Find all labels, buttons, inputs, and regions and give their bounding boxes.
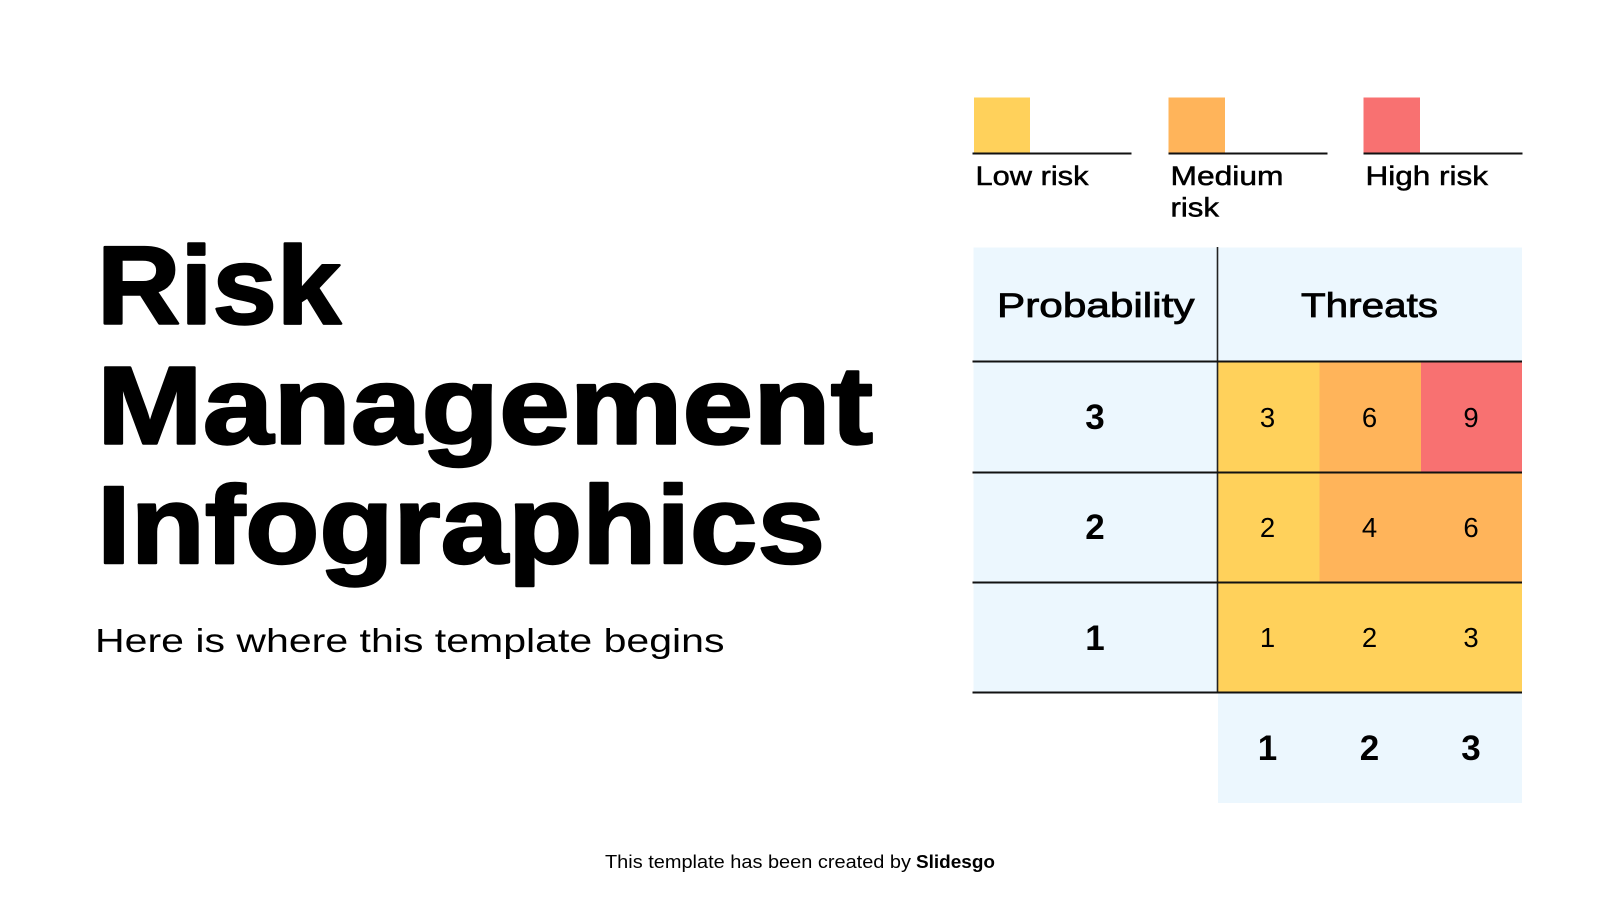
threat axis numbers: 2 — [1360, 729, 1379, 768]
heading: probability: Probability — [997, 287, 1194, 325]
title: Risk — [97, 224, 342, 348]
panel: threats axis background — [1218, 692, 1522, 803]
legend item: medium risk: Medium — [1170, 161, 1284, 191]
matrix values: 6 — [1463, 512, 1479, 543]
legend item: low risk: Low risk — [976, 161, 1089, 191]
matrix values: 1 — [1260, 622, 1275, 653]
footer credit: Slidesgo — [916, 852, 995, 872]
legend item: medium risk: risk — [1170, 192, 1220, 222]
matrix values: 3 — [1260, 402, 1275, 433]
heading: threats: Threats — [1301, 287, 1438, 325]
matrix values: 3 — [1463, 622, 1479, 653]
title: Infographics — [97, 464, 825, 587]
panel: header and probability column background — [974, 248, 1522, 362]
heat map cells — [1218, 361, 1522, 692]
legend — [972, 98, 1522, 222]
probability axis numbers: 1 — [1085, 619, 1105, 658]
risk matrix table — [972, 247, 1522, 803]
legend item: high risk — [1364, 98, 1522, 191]
matrix values: 2 — [1260, 512, 1275, 543]
matrix values: 9 — [1463, 402, 1479, 433]
subtitle: Here is where this template begins — [95, 622, 724, 659]
matrix values: 4 — [1362, 512, 1377, 543]
threat axis numbers — [1258, 729, 1481, 768]
legend item: medium risk — [1168, 98, 1328, 222]
probability axis numbers — [1085, 398, 1105, 658]
title — [97, 224, 873, 587]
footer credit: This template has been created by — [605, 852, 911, 872]
threat axis numbers: 1 — [1258, 729, 1277, 768]
matrix values: 2 — [1362, 622, 1377, 653]
title: Management — [97, 344, 873, 468]
legend item: high risk: High risk — [1366, 161, 1489, 191]
matrix values — [1260, 402, 1479, 653]
panel: probability rows background — [974, 361, 1218, 692]
probability axis numbers: 3 — [1085, 398, 1105, 437]
threat axis numbers: 3 — [1461, 729, 1481, 768]
legend item: low risk — [972, 98, 1132, 191]
probability axis numbers: 2 — [1085, 508, 1105, 547]
matrix values: 6 — [1362, 402, 1377, 433]
